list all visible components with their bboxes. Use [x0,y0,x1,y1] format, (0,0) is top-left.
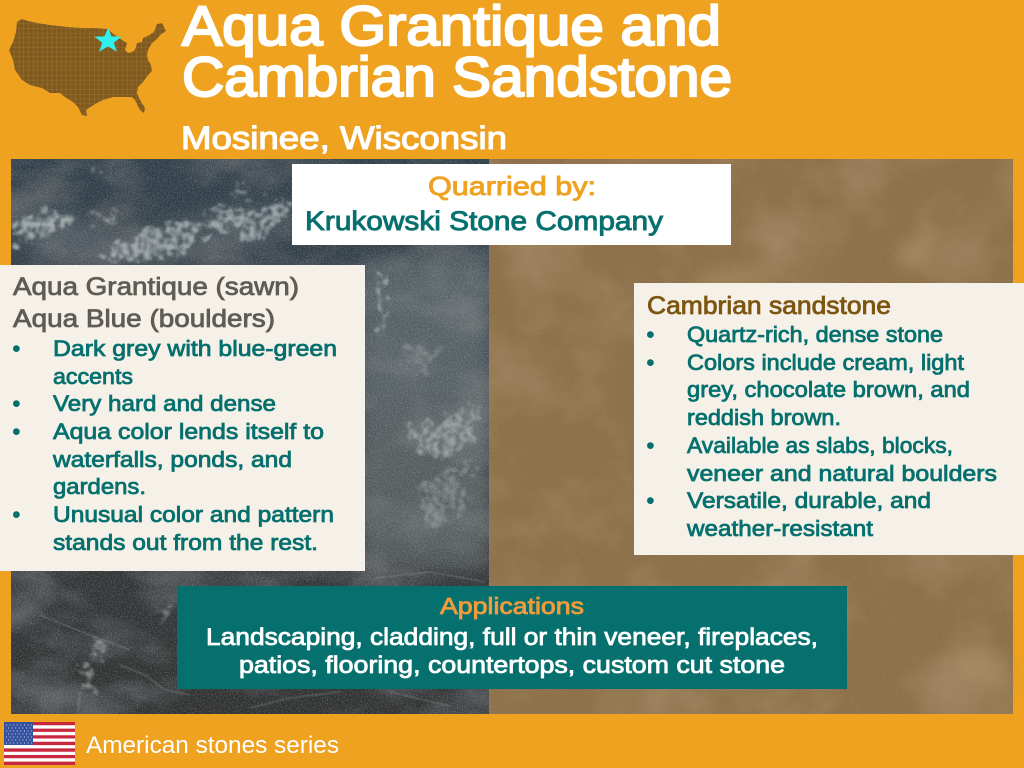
icon: american flag [4,722,75,765]
heading: applications: Applications [440,593,584,619]
bullet list: cambrian sandstone features: reddish brown. [687,405,841,430]
text: list of applications: patios, flooring, countertops, custom cut stone [239,652,785,679]
bullet list: aqua grantique features: Very hard and dense [53,391,276,416]
bullet list: aqua grantique features: waterfalls, ponds, and [52,447,292,472]
bullet list: cambrian sandstone features: • [646,349,655,377]
company name: Krukowski Stone Company [305,206,664,236]
panel: aqua grantique [0,265,365,571]
bullet list: cambrian sandstone features: • [646,321,655,349]
bullet list: cambrian sandstone features: Versatile, durable, and [687,488,931,513]
bullet list: cambrian sandstone features: weather-resistant [686,516,874,541]
icon: cyan location star [94,28,122,52]
bullet list: cambrian sandstone features: • [646,487,655,515]
photo: aqua grantique stone [10,159,489,714]
bullet list: cambrian sandstone features: Colors include cream, light [687,350,965,375]
footer: series label: American stones series [86,732,339,759]
photo: cambrian sandstone [489,159,1013,714]
bullet list: cambrian sandstone features: Quartz-rich, dense stone [687,322,943,347]
bullet list: aqua grantique features [12,335,337,555]
heading: aqua grantique names: Aqua Blue (boulders) [13,305,275,333]
bullet list: aqua grantique features: stands out from the rest. [53,530,318,555]
panel: applications [177,586,847,689]
bullet list: cambrian sandstone features: veneer and natural boulders [687,461,997,486]
label: quarried by: Quarried by: [428,171,596,201]
bullet list: aqua grantique features: Dark grey with blue-green [53,336,337,361]
title [182,0,732,108]
bullet list: aqua grantique features: accents [53,364,133,389]
text: list of applications: Landscaping, cladding, full or thin veneer, fireplaces, [206,624,818,651]
bullet list: cambrian sandstone features: Available as slabs, blocks, [687,433,953,458]
heading: aqua grantique names: Aqua Grantique (sawn) [13,273,299,301]
subtitle: location: Mosinee, Wisconsin [181,120,507,156]
bullet list: aqua grantique features: Unusual color and pattern [53,502,334,527]
icon: map of the United States with location star [9,19,166,116]
bullet list: aqua grantique features: • [12,390,21,418]
heading: cambrian sandstone: Cambrian sandstone [647,292,891,320]
callout: quarried by [292,164,731,245]
bullet list: cambrian sandstone features [646,321,997,541]
bullet list: aqua grantique features: gardens. [53,474,146,499]
panel: cambrian sandstone [634,283,1024,555]
bullet list: cambrian sandstone features: grey, chocolate brown, and [687,377,970,402]
heading: aqua grantique names [13,273,299,333]
bullet list: aqua grantique features: • [12,418,21,446]
title: Cambrian Sandstone [182,45,732,108]
bullet list: aqua grantique features: Aqua color lends itself to [53,419,324,444]
text: list of applications [206,624,818,679]
bullet list: aqua grantique features: • [12,335,21,363]
bullet list: cambrian sandstone features: • [646,432,655,460]
bullet list: aqua grantique features: • [12,501,21,529]
